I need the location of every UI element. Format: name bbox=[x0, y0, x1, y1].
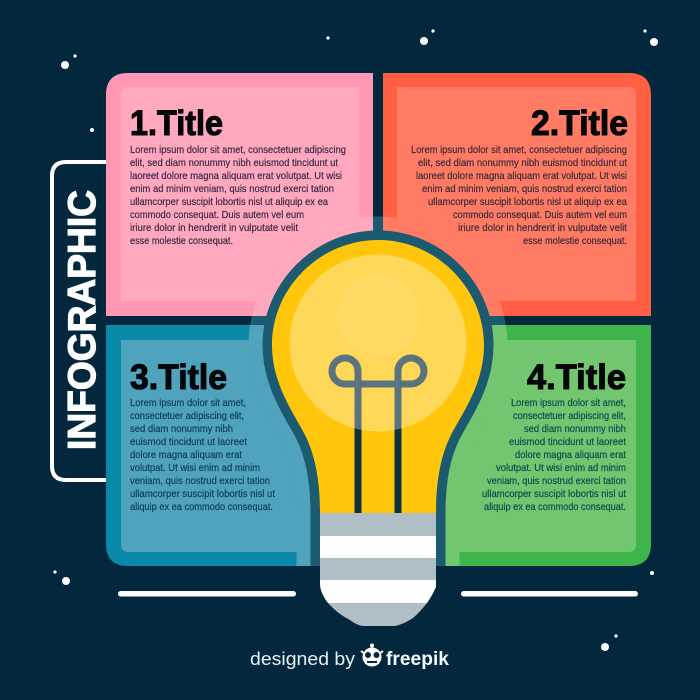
panel 3 body: dolore magna aliquam erat bbox=[130, 449, 242, 461]
panel 2 body: enim ad minim veniam, quis nostrud exerci tation bbox=[422, 183, 627, 195]
panel 3 body: consectetuer adipiscing elit, bbox=[130, 410, 244, 422]
panel 2 body: iriure dolor in hendrerit in vulputate velit bbox=[458, 222, 627, 234]
panel 4 title: 4.Title bbox=[527, 358, 626, 397]
panel 1 body: esse molestie consequat. bbox=[130, 235, 233, 247]
panel 1 text bbox=[130, 104, 346, 247]
panel 4 background bbox=[446, 325, 651, 566]
filament bbox=[332, 358, 424, 513]
panel 3 body: volutpat. Ut wisi enim ad minim bbox=[130, 462, 260, 474]
panel 3 body: veniam, quis nostrud exerci tation bbox=[130, 475, 270, 487]
panel 2 body: laoreet dolore magna aliquam erat volutpat. Ut wisi bbox=[416, 170, 627, 182]
panel 4 body: ullamcorper suscipit lobortis nisl ut bbox=[482, 488, 626, 500]
panel 1 body: enim ad minim veniam, quis nostrud exerci tation bbox=[130, 183, 334, 195]
panel 3 body: euismod tincidunt ut laoreet bbox=[130, 436, 247, 448]
footer credit bbox=[250, 644, 449, 670]
panel 2 body bbox=[411, 144, 627, 247]
panel 3 body: ullamcorper suscipit lobortis nisl ut bbox=[130, 488, 275, 500]
panel 4 body: consectetuer adipiscing elit, bbox=[513, 410, 626, 422]
panel 1 background bbox=[106, 73, 373, 316]
panel 2 background bbox=[383, 73, 651, 316]
panel 2 title: 2.Title bbox=[531, 104, 628, 143]
panel 3 body: Lorem ipsum dolor sit amet, bbox=[130, 397, 246, 409]
glow circle small bbox=[337, 274, 419, 356]
panel 3 body: sed diam nonummy nibh bbox=[130, 423, 233, 435]
bulb glass bbox=[272, 240, 484, 513]
designed by text: designed by bbox=[250, 648, 356, 669]
panel 4 body: euismod tincidunt ut laoreet bbox=[509, 436, 626, 448]
panel 4 body bbox=[482, 397, 626, 513]
panel 3 body: aliquip ex ea commodo consequat. bbox=[130, 501, 273, 513]
side label: INFOGRAPHIC bracket bbox=[52, 162, 106, 480]
panel 4 body: volutpat. Ut wisi enim ad minim bbox=[496, 462, 626, 474]
panel 1 body: Lorem ipsum dolor sit amet, consectetuer adipiscing bbox=[130, 144, 346, 156]
panel 3 body bbox=[130, 397, 275, 513]
panel 4 body: Lorem ipsum dolor sit amet, bbox=[511, 397, 626, 409]
panel 1 body: iriure dolor in hendrerit in vulputate velit bbox=[130, 222, 298, 234]
light bulb bbox=[272, 240, 484, 626]
panel 4 body: sed diam nonummy nibh bbox=[524, 423, 626, 435]
panel 2 body: esse molestie consequat. bbox=[523, 235, 627, 247]
panel 2 body: ullamcorper suscipit lobortis nisl ut aliquip ex ea bbox=[428, 196, 627, 208]
panel 1 body: commodo consequat. Duis autem vel eum bbox=[130, 209, 304, 221]
panel 1 title: 1.Title bbox=[130, 104, 223, 143]
panel 3 background bbox=[106, 325, 310, 566]
panel 4 body: dolore magna aliquam erat bbox=[515, 449, 626, 461]
panel 1 body bbox=[130, 144, 346, 247]
panel 4 body: veniam, quis nostrud exerci tation bbox=[487, 475, 626, 487]
panel 1 body: laoreet dolore magna aliquam erat volutpat. Ut wisi bbox=[130, 170, 342, 182]
icon: freepik logo bbox=[361, 644, 383, 666]
panel 1 body: ullamcorper suscipit lobortis nisl ut aliquip ex ea bbox=[130, 196, 328, 208]
panel 2 body: Lorem ipsum dolor sit amet, consectetuer adipiscing bbox=[411, 144, 627, 156]
panel 2 body: commodo consequat. Duis autem vel eum bbox=[453, 209, 627, 221]
panel 3 title: 3.Title bbox=[130, 358, 227, 397]
panel 4 text bbox=[482, 358, 626, 513]
bulb outline bbox=[272, 240, 484, 600]
white ground line right bbox=[461, 591, 638, 596]
panel 3 text bbox=[130, 358, 275, 513]
bulb screw base bbox=[320, 513, 436, 626]
glow circle large bbox=[290, 254, 466, 432]
decorative stars bbox=[53, 29, 658, 651]
freepik wordmark: freepik bbox=[386, 648, 449, 670]
white ground line left bbox=[118, 591, 296, 596]
side label text: INFOGRAPHIC bbox=[61, 190, 104, 450]
panel 1 body: elit, sed diam nonummy nibh euismod tincidunt ut bbox=[130, 157, 338, 169]
panel 2 body: elit, sed diam nonummy nibh euismod tincidunt ut bbox=[418, 157, 627, 169]
panel 2 text bbox=[411, 104, 628, 247]
panel 4 body: aliquip ex ea commodo consequat. bbox=[484, 501, 626, 513]
halo across panel gaps bbox=[250, 216, 506, 325]
